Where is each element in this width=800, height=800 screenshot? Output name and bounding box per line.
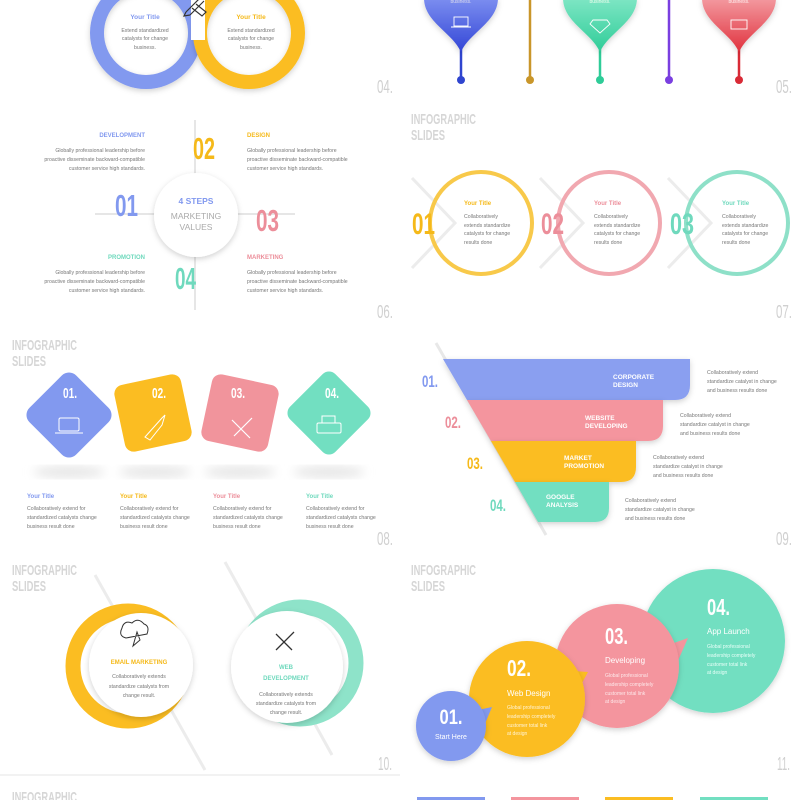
slide 08: diamonds: standardized catalysts change	[306, 515, 376, 521]
slide 07: three circles: 03	[670, 208, 694, 241]
text: your title blue	[121, 14, 169, 51]
step design: customer service high standards.	[247, 166, 323, 172]
numbers: 02	[193, 131, 215, 166]
web development ring: change result.	[270, 710, 302, 716]
step promotion: Globally professional leadership before	[55, 270, 145, 276]
slide 10: two ring circles	[12, 562, 392, 774]
bubble 3: at design	[605, 699, 626, 705]
page number 04: 04.	[377, 77, 393, 97]
slide 09: funnel: 03.	[467, 454, 483, 473]
text: your title yellow: Extend standardized	[227, 28, 275, 34]
step 3 text	[722, 201, 769, 246]
step 2 text	[594, 201, 641, 246]
slide 08: diamonds: business result done	[213, 524, 261, 530]
bubble 1	[416, 691, 492, 761]
step 1 text: results done	[464, 240, 492, 246]
band 1: DESIGN	[613, 382, 638, 389]
bubble 1: 01.	[440, 706, 462, 729]
web development ring	[231, 607, 356, 723]
step development: DEVELOPMENT	[99, 133, 145, 139]
band 2	[467, 400, 663, 441]
text: your title yellow: catalysts for change	[228, 36, 274, 42]
descriptions: and business results done	[680, 431, 740, 437]
step design: DESIGN	[247, 133, 270, 139]
bubble 3: customer total link	[605, 691, 646, 697]
page number 06: 06.	[377, 302, 393, 322]
page number 08: 08.	[377, 529, 393, 549]
descriptions: standardize catalyst in change	[680, 422, 750, 428]
captions: business result done	[27, 524, 75, 530]
pin blue	[424, 0, 498, 84]
text: your title yellow	[227, 14, 275, 51]
email marketing ring: change result.	[123, 693, 155, 699]
text: your title blue: catalysts for change	[122, 36, 168, 42]
bubble 2: customer total link	[507, 723, 548, 729]
step design: Globally professional leadership before	[247, 148, 337, 154]
band 3: PROMOTION	[564, 463, 604, 470]
step 2 text: extends standardize	[594, 223, 641, 229]
bubble 3: leadership completely	[605, 682, 654, 688]
slide 08: diamonds: business result done	[306, 524, 354, 530]
bubble 4: at design	[707, 670, 728, 676]
step 2 text: catalysts for change	[594, 231, 640, 237]
step 1 text: catalysts for change	[464, 231, 510, 237]
slide 08: diamonds: Your Title	[120, 494, 148, 500]
numbers	[115, 131, 279, 296]
title: INFOGRAPHIC	[411, 562, 476, 579]
band 2: DEVELOPING	[585, 423, 628, 430]
bottom bars	[417, 797, 768, 800]
diamond 2	[111, 371, 195, 455]
band 2: WEBSITE	[585, 415, 615, 422]
step marketing: customer service high standards.	[247, 288, 323, 294]
step 2 text: results done	[594, 240, 622, 246]
bubble 4: customer total link	[707, 662, 748, 668]
bubble 4: leadership completely	[707, 653, 756, 659]
pin green	[563, 0, 637, 84]
bubble 2: 02.	[507, 655, 531, 681]
step 3 text: catalysts for change	[722, 231, 768, 237]
slide 08: diamonds	[12, 337, 393, 549]
title	[12, 337, 77, 370]
diamond 2: 02.	[152, 385, 166, 402]
web development ring: DEVELOPMENT	[263, 676, 309, 682]
title	[411, 562, 476, 595]
bubble 4: App Launch	[707, 627, 750, 636]
bubble 4: 04.	[707, 594, 730, 620]
descriptions: Collaboratively extend	[625, 498, 676, 504]
step marketing: proactive disseminate backward-compatible	[247, 279, 348, 285]
step marketing: MARKETING	[247, 255, 284, 261]
descriptions: and business results done	[625, 516, 685, 522]
text: your title blue: business.	[134, 45, 156, 51]
step 2 text: Collaboratively	[594, 214, 628, 220]
page number 10: 10.	[378, 754, 392, 774]
step 3 text: Your Title	[722, 201, 750, 207]
slide 07: three circles: 02	[541, 208, 564, 241]
web development ring: Collaboratively extends	[259, 692, 313, 698]
descriptions	[625, 370, 777, 522]
step 1 text: Collaboratively	[464, 214, 498, 220]
title: SLIDES	[411, 127, 445, 144]
web development ring: standardize catalysts from	[256, 701, 316, 707]
bubble 2: Global professional	[507, 705, 550, 711]
descriptions: Collaboratively extend	[707, 370, 758, 376]
text: your title blue: Extend standardized	[121, 28, 169, 34]
bubble 3: 03.	[605, 623, 628, 649]
descriptions: standardize catalyst in change	[653, 464, 723, 470]
diamond 1: 01.	[63, 385, 77, 402]
band 4: ANALYSIS	[546, 502, 579, 509]
band 1: CORPORATE	[613, 374, 655, 381]
step 3 text: extends standardize	[722, 223, 769, 229]
center circle	[154, 173, 238, 257]
diamond 3	[198, 371, 282, 455]
bubble 4: Global professional	[707, 644, 750, 650]
band 4	[515, 482, 609, 522]
step 2 text: Your Title	[594, 201, 622, 207]
title: INFOGRAPHIC	[12, 562, 77, 579]
title	[12, 562, 77, 595]
email marketing ring: standardize catalysts from	[109, 684, 169, 690]
title: INFOGRAPHIC	[411, 111, 476, 128]
text: your title yellow: Your Title	[236, 14, 266, 21]
slide 07: three circles	[411, 111, 792, 322]
email marketing ring	[73, 611, 193, 721]
step marketing: Globally professional leadership before	[247, 270, 337, 276]
icon: pencil ruler	[184, 0, 206, 16]
pin red	[702, 0, 776, 84]
captions	[27, 494, 97, 530]
step development: Globally professional leadership before	[55, 148, 145, 154]
descriptions: Collaboratively extend	[653, 455, 704, 461]
center circle: 4 STEPS	[179, 196, 214, 206]
numbers: 04	[175, 261, 196, 296]
step promotion: PROMOTION	[108, 255, 145, 261]
step 1 text: Your Title	[464, 201, 492, 207]
step development: proactive disseminate backward-compatible	[44, 157, 145, 163]
diamond 3: 03.	[231, 385, 245, 402]
descriptions: and business results done	[653, 473, 713, 479]
diamond 1	[22, 368, 116, 462]
bubble 3	[555, 604, 688, 728]
descriptions: Collaboratively extend	[680, 413, 731, 419]
numbers: 03	[256, 203, 279, 238]
step development	[44, 133, 145, 172]
descriptions: standardize catalyst in change	[625, 507, 695, 513]
bubble 1: Start Here	[435, 734, 467, 741]
slide 08: diamonds: Your Title	[306, 494, 334, 500]
slide 05: teardrop pins	[424, 0, 792, 97]
page number 11: 11.	[777, 754, 790, 774]
slide 08: diamonds: Collaboratively extend for	[213, 506, 272, 512]
title	[411, 111, 476, 144]
bubble 2	[469, 641, 588, 757]
slide 08: diamonds: Your Title	[213, 494, 241, 500]
bubble 4	[641, 569, 785, 713]
bubble 2: at design	[507, 731, 528, 737]
slide 08: diamonds: business result done	[120, 524, 168, 530]
diamond 4	[282, 366, 376, 460]
slide 04: overlapping rings	[97, 0, 393, 97]
title: SLIDES	[12, 353, 46, 370]
step promotion: customer service high standards.	[69, 288, 145, 294]
diamond 4: 04.	[325, 385, 339, 402]
step 3 text: Collaboratively	[722, 214, 756, 220]
captions: standardized catalysts change	[27, 515, 97, 521]
slide 08: diamonds: standardized catalysts change	[213, 515, 283, 521]
step 1 text: extends standardize	[464, 223, 511, 229]
slide 09: funnel	[422, 343, 792, 549]
slide 09: funnel: 01.	[422, 372, 438, 391]
bubble 3: Developing	[605, 656, 645, 665]
email marketing ring: EMAIL MARKETING	[111, 660, 168, 666]
step development: customer service high standards.	[69, 166, 145, 172]
step 3 text: results done	[722, 240, 750, 246]
band 3	[491, 441, 636, 482]
email marketing ring: Collaboratively extends	[112, 674, 166, 680]
title: SLIDES	[12, 578, 46, 595]
center circle: VALUES	[180, 222, 213, 232]
slide 06: 4 steps marketing values	[44, 120, 393, 322]
captions: Collaboratively extend for	[27, 506, 86, 512]
step 1 text	[464, 201, 511, 246]
web development ring: WEB	[279, 665, 294, 671]
step design: proactive disseminate backward-compatible	[247, 157, 348, 163]
step marketing	[247, 255, 348, 294]
slide 08: diamonds: Collaboratively extend for	[120, 506, 179, 512]
step promotion: proactive disseminate backward-compatible	[44, 279, 145, 285]
text: your title yellow: business.	[240, 45, 262, 51]
slide 11: growing bubbles	[411, 562, 790, 800]
step design	[247, 133, 348, 172]
bubble 2: Web Design	[507, 689, 550, 698]
slide 09: funnel: 04.	[490, 496, 506, 515]
numbers: 01	[115, 188, 138, 223]
text: your title blue: Your Title	[130, 14, 160, 21]
slide 07: three circles: 01	[412, 208, 435, 241]
band 1	[443, 359, 690, 400]
captions: Your Title	[27, 494, 55, 500]
slide 09: funnel: 02.	[445, 413, 461, 432]
band 3: MARKET	[564, 455, 592, 462]
center circle: MARKETING	[171, 211, 221, 221]
title: SLIDES	[411, 578, 445, 595]
band 4: GOOGLE	[546, 494, 575, 501]
bubble 2: leadership completely	[507, 714, 556, 720]
bubble 3: Global professional	[605, 673, 648, 679]
slide 08: diamonds: standardized catalysts change	[120, 515, 190, 521]
slide 08: diamonds: Collaboratively extend for	[306, 506, 365, 512]
descriptions: standardize catalyst in change	[707, 379, 777, 385]
descriptions: and business results done	[707, 388, 767, 394]
step promotion	[44, 255, 145, 294]
title: INFOGRAPHIC	[12, 337, 77, 354]
